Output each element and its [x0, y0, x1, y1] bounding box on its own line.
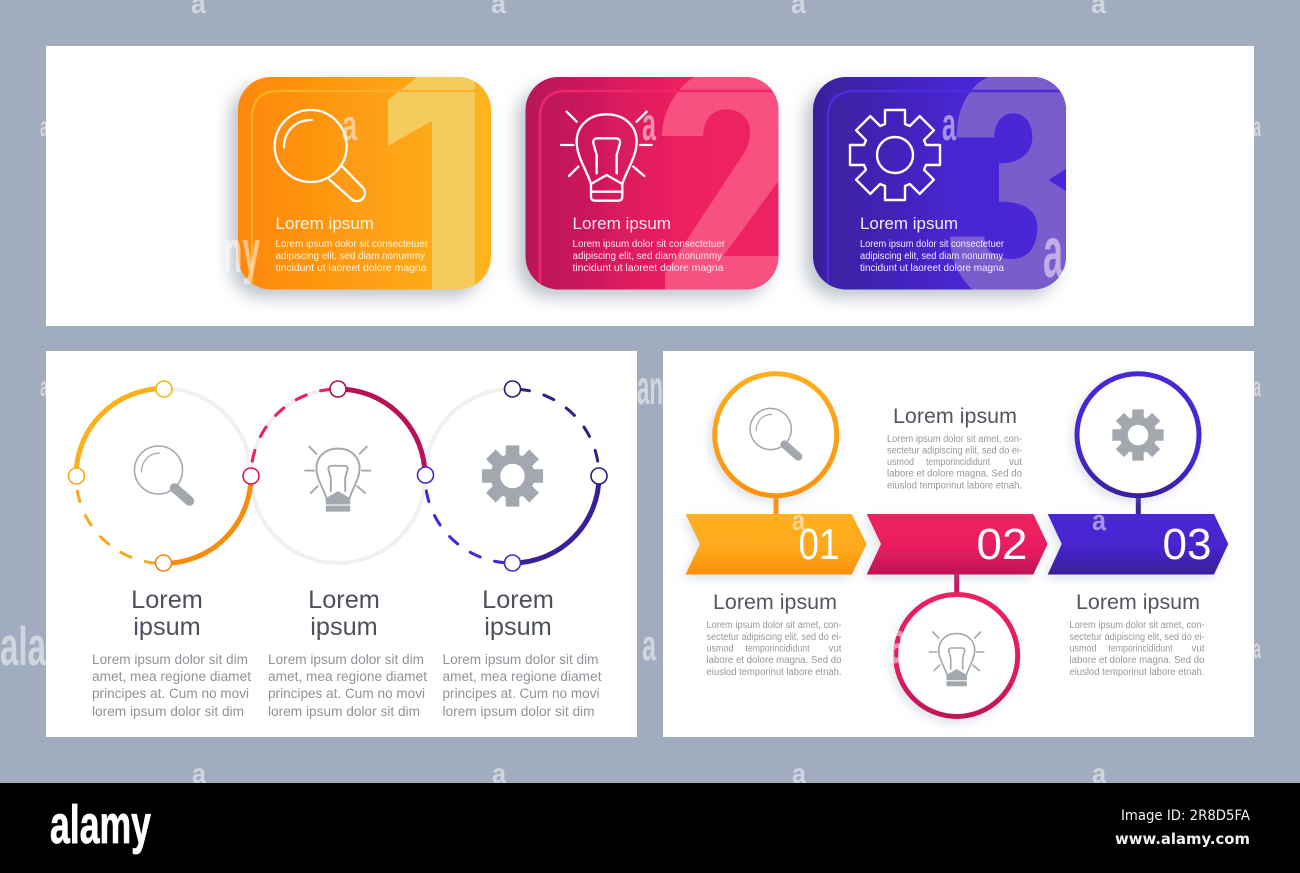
timeline text: right: sectetur adipiscing elit, sed do ei- [1070, 632, 1204, 643]
timeline text: middle: Lorem ipsum dolor sit amet, con- [887, 434, 1022, 445]
ring column titles: Lorem [482, 586, 554, 614]
card 1 large numeral [388, 70, 475, 295]
arrow 02 number: 02 [976, 520, 1028, 569]
arrow 03 shape [1048, 514, 1228, 574]
card 3 text: adipiscing elit, sed diam nonummy [860, 250, 1004, 262]
ring column text: amet, mea regione diamet [442, 668, 602, 684]
ring column text: amet, mea regione diamet [268, 668, 427, 684]
ring column text: lorem ipsum dolor sit dim [442, 703, 594, 719]
watermark fragments: a [888, 609, 908, 676]
timeline text: left: labore et dolore magna. Sed do [706, 655, 842, 666]
watermark fragments: ny [223, 218, 260, 285]
card 1 [238, 70, 491, 295]
icon: gray magnifier [134, 446, 190, 501]
icon: gray bulb [305, 447, 370, 511]
ring 1 arcs [76, 388, 251, 564]
timeline titles: Lorem ipsum [713, 591, 837, 614]
footer url: www.alamy.com [1115, 830, 1250, 848]
timeline text: left: usmod [706, 644, 734, 654]
footer bar [0, 783, 1300, 873]
card 2 background [526, 77, 778, 290]
watermark fragments: an [637, 362, 663, 415]
arrow 02 [867, 514, 1048, 574]
arrow 01 shape [686, 514, 867, 574]
card 1 text [276, 238, 428, 274]
ring column text: principes at. Cum no movi [92, 685, 249, 701]
footer logo: alamy [50, 795, 151, 855]
watermark fragments: a [642, 621, 656, 670]
watermark fragments: a [792, 505, 806, 537]
card 2 title: Lorem ipsum [572, 214, 671, 233]
icon: magnifier outline [275, 110, 365, 201]
ring column titles: ipsum [310, 613, 378, 641]
timeline text: middle: temporincididunt [926, 457, 990, 468]
timeline text: left: sectetur adipiscing elit, sed do ei- [706, 632, 842, 643]
timeline text: left [706, 620, 842, 678]
ring 2 arcs [251, 389, 425, 476]
icon: light bulb outline [561, 112, 652, 201]
ring column text: Lorem ipsum dolor sit dim [268, 651, 424, 667]
ring column text: amet, mea regione diamet [92, 668, 251, 684]
watermark fragments: a [1253, 371, 1261, 402]
timeline text: right [1070, 620, 1205, 678]
ring 3 base [425, 389, 512, 476]
ring column text: principes at. Cum no movi [442, 685, 600, 701]
watermark fragments: ala [0, 615, 46, 677]
card 2 text: adipiscing elit, sed diam nonummy [572, 250, 723, 262]
timeline circle 1 [715, 374, 837, 496]
card 2 text: tincidunt ut laoreet dolore magna [572, 262, 724, 274]
card 1 text: tincidunt ut laoreet dolore magna [276, 262, 427, 274]
footer image id: Image ID: 2R8D5FA [1121, 808, 1250, 824]
card 1 background [238, 77, 491, 290]
card 1 text: adipiscing elit, sed diam nonummy [276, 250, 426, 262]
card 3 background [813, 77, 1066, 290]
ring chain [68, 381, 607, 571]
timeline text: left: vut [828, 644, 842, 654]
arrow 02 shape [867, 514, 1048, 574]
watermark fragments: a [1092, 758, 1106, 789]
card 3 text [860, 238, 1004, 274]
timeline text: right: vut [1192, 644, 1205, 654]
timeline connectors [776, 494, 1138, 596]
ring column text: Lorem ipsum dolor sit dim [442, 651, 598, 667]
card 3 large numeral [950, 73, 1067, 293]
timeline circle 3 [1077, 374, 1199, 496]
ring column text: lorem ipsum dolor sit dim [268, 703, 420, 719]
card 1 title: Lorem ipsum [276, 214, 374, 233]
icon: timeline magnifier [750, 408, 798, 457]
watermark fragments: a [1092, 505, 1107, 537]
ring 2 base [251, 389, 425, 563]
icon: timeline gear [1112, 409, 1164, 461]
card 3 title: Lorem ipsum [860, 214, 958, 233]
card 3 [813, 73, 1072, 295]
timeline text: middle: usmod [887, 457, 914, 468]
watermark fragments: a [40, 371, 48, 402]
card 3 text: tincidunt ut laoreet dolore magna [860, 262, 1004, 274]
watermark fragments: a [40, 111, 48, 142]
card 2 text: Lorem ipsum dolor sit consectetuer [572, 238, 725, 250]
ring 3 arcs [425, 389, 599, 563]
card 1 text: Lorem ipsum dolor sit consectetuer [276, 238, 428, 250]
timeline text: middle: eiuslod temporinut labore etnah. [887, 480, 1022, 492]
timeline titles [713, 405, 1200, 614]
icon: timeline bulb [929, 632, 984, 685]
timeline text: middle: vut [1009, 457, 1022, 468]
ring column titles: Lorem [131, 586, 203, 614]
panel: arrows timeline [663, 351, 1254, 737]
ring column titles: Lorem [308, 586, 380, 614]
timeline text: left: Lorem ipsum dolor sit amet, con- [706, 620, 842, 631]
icon: gray gear [482, 445, 543, 507]
watermark fragments: a [192, 758, 206, 789]
timeline text: right: usmod [1070, 644, 1096, 654]
icon: gear outline [850, 110, 940, 200]
ring column titles: ipsum [133, 613, 201, 641]
ring column titles: ipsum [484, 613, 552, 641]
card 3 text: Lorem ipsum dolor sit consectetuer [860, 238, 1004, 250]
timeline titles: Lorem ipsum [893, 405, 1017, 428]
ring column text: principes at. Cum no movi [268, 685, 425, 701]
watermark fragments: a [642, 98, 656, 150]
panel: circles [46, 351, 637, 737]
arrow 01 [686, 514, 867, 574]
timeline text: left: temporincididunt [746, 644, 810, 654]
watermark fragments: a [1253, 111, 1261, 142]
timeline text: right: eiuslod temporinut labore etnah. [1070, 667, 1204, 678]
ring column text [92, 651, 602, 719]
card 2 text [572, 238, 725, 274]
card 2 large numeral [662, 73, 782, 293]
ring nodes [68, 381, 607, 571]
watermark fragments: a [792, 758, 806, 789]
timeline text: right: temporincididunt [1108, 644, 1173, 654]
timeline text: left: eiuslod temporinut labore etnah. [706, 667, 842, 678]
watermark fragments: a [942, 98, 956, 150]
timeline text: middle: labore et dolore magna. Sed do [887, 468, 1022, 480]
arrow 01 number: 01 [798, 520, 840, 569]
watermark fragments: a [342, 101, 357, 150]
watermark fragments: a [1043, 213, 1063, 293]
ring column titles [131, 586, 554, 641]
arrow 03 [1048, 514, 1228, 574]
ring column text: lorem ipsum dolor sit dim [92, 703, 244, 719]
timeline text: middle [887, 434, 1022, 492]
timeline titles: Lorem ipsum [1076, 591, 1200, 614]
watermark fragments: a [1253, 633, 1261, 664]
timeline text: right: labore et dolore magna. Sed do [1070, 655, 1205, 666]
watermark fragments: a [492, 758, 506, 789]
card 2 [526, 73, 785, 295]
ring column text: Lorem ipsum dolor sit dim [92, 651, 248, 667]
timeline circle 2 [896, 594, 1018, 716]
panel: top cards [46, 46, 1254, 326]
arrow 03 number: 03 [1162, 520, 1212, 569]
timeline text: middle: sectetur adipiscing elit, sed do ei- [887, 446, 1022, 456]
ring 1 base [164, 388, 251, 476]
timeline text: right: Lorem ipsum dolor sit amet, con- [1070, 620, 1204, 631]
